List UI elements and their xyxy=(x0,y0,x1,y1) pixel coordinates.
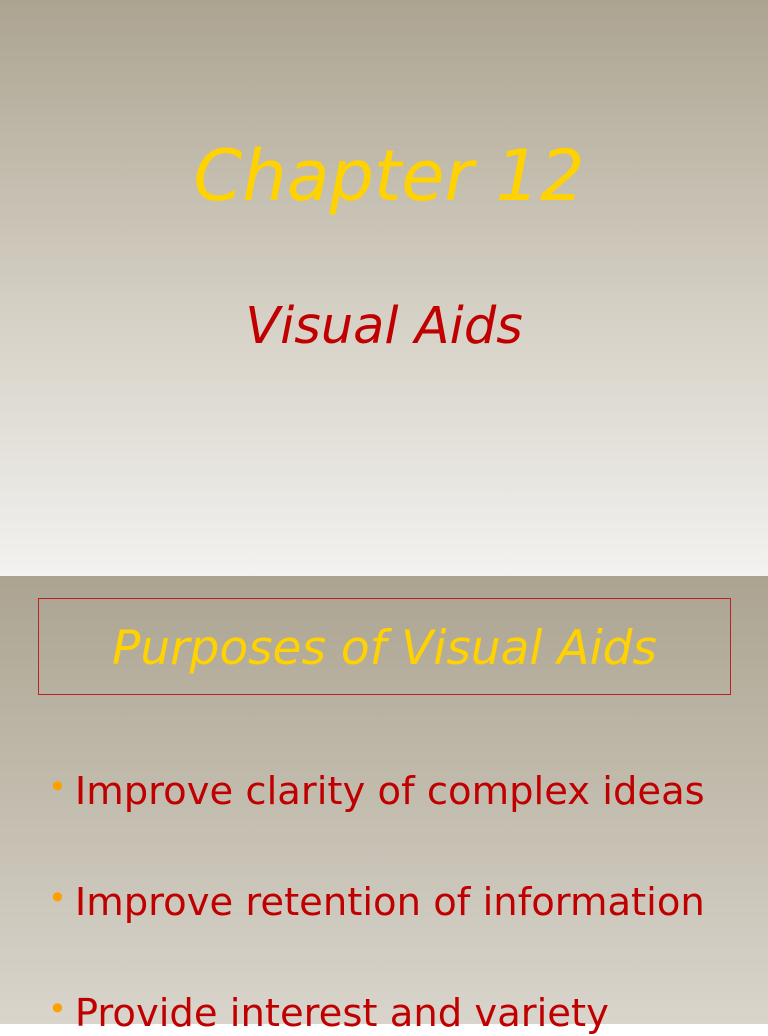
bullet 3: •Provide interest and variety xyxy=(48,990,609,1036)
heading box xyxy=(38,598,731,695)
bullet 2: •Improve retention of information xyxy=(48,879,705,925)
slide 1 xyxy=(0,0,768,576)
heading box: Purposes of Visual Aids xyxy=(112,621,657,676)
bullet 1: •Improve clarity of complex ideas xyxy=(48,768,705,814)
slide 2 xyxy=(0,576,768,1024)
title: Chapter 12 xyxy=(193,135,585,217)
subtitle: Visual Aids xyxy=(245,297,523,356)
